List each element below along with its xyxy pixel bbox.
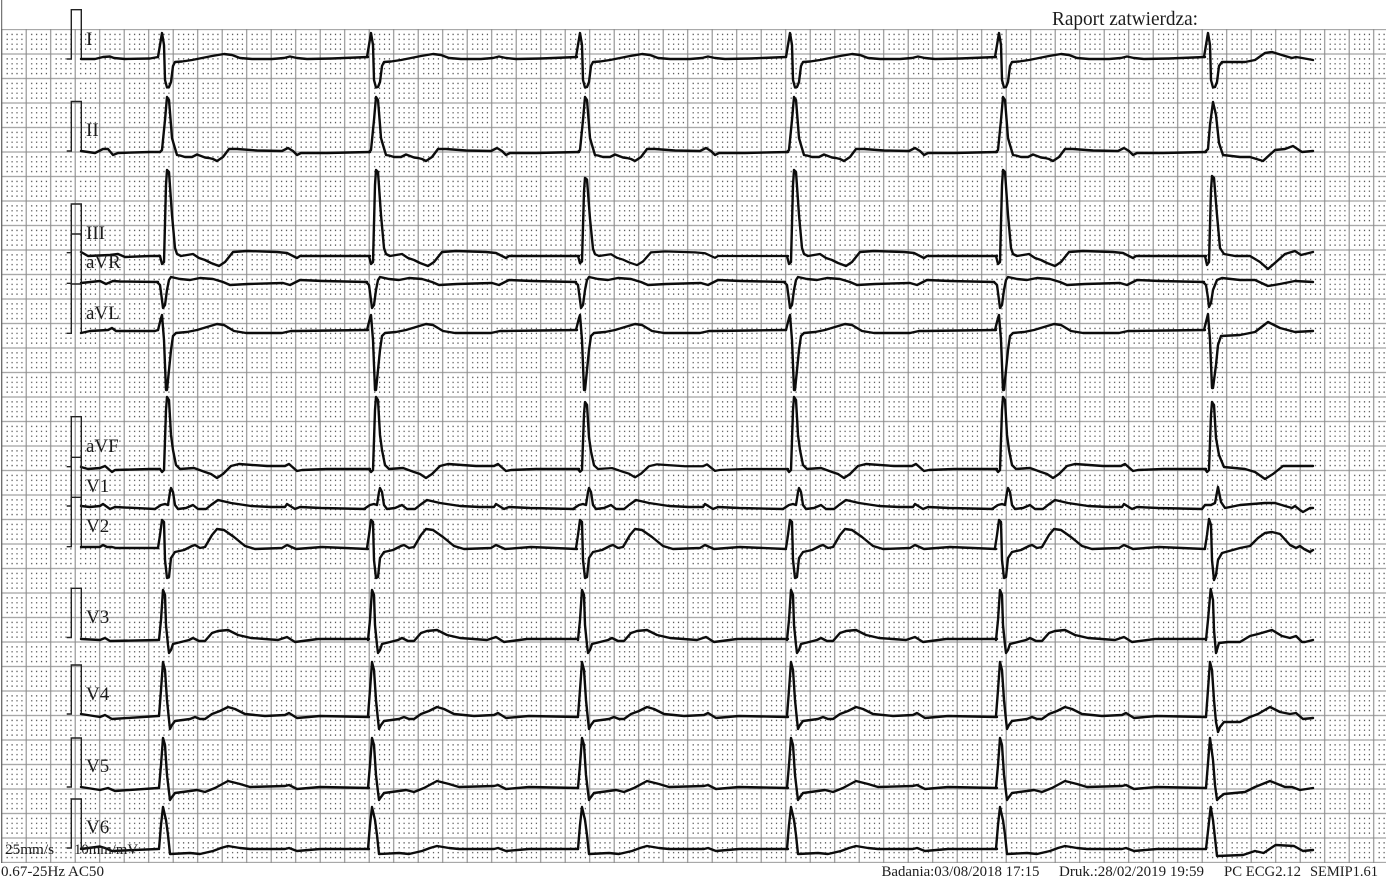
lead aVR calibration pulse xyxy=(67,234,81,283)
lead aVF waveform xyxy=(81,397,1313,479)
lead V3 waveform xyxy=(81,589,1313,653)
lead V4 xyxy=(67,662,1313,732)
lead aVF label: aVF xyxy=(86,436,119,457)
lead aVL waveform xyxy=(81,314,1313,390)
paper speed label: 25mm/s xyxy=(5,842,54,858)
examination date: Badania:03/08/2018 17:15 xyxy=(882,864,1040,880)
lead III waveform xyxy=(81,170,1313,269)
lead I waveform xyxy=(81,33,1313,88)
filter settings: 0.67-25Hz AC50 xyxy=(1,864,104,880)
lead V1 waveform xyxy=(81,487,1313,512)
gain label: 10mm/mV xyxy=(74,842,138,858)
software version: PC ECG2.12 xyxy=(1224,864,1301,880)
lead V3 label: V3 xyxy=(86,607,109,628)
lead III label: III xyxy=(86,223,105,244)
lead II calibration pulse xyxy=(67,102,81,151)
lead V4 label: V4 xyxy=(86,684,110,705)
report approval heading: Raport zatwierdza: xyxy=(1052,8,1198,30)
lead V6 calibration pulse xyxy=(67,799,81,848)
lead V5 xyxy=(67,738,1313,800)
lead V5 waveform xyxy=(81,738,1313,800)
firmware version: SEMIP1.61 xyxy=(1310,864,1378,880)
lead aVR label: aVR xyxy=(86,252,121,273)
lead V1 label: V1 xyxy=(86,476,109,497)
lead V4 calibration pulse xyxy=(67,665,81,714)
lead II label: II xyxy=(86,120,99,141)
lead V6 label: V6 xyxy=(86,817,109,838)
lead V4 waveform xyxy=(81,662,1313,732)
lead aVF calibration pulse xyxy=(67,417,81,467)
lead II xyxy=(67,97,1313,161)
lead aVL calibration pulse xyxy=(67,284,81,333)
lead V6 waveform xyxy=(81,807,1313,856)
lead aVR xyxy=(67,234,1313,308)
lead aVF xyxy=(67,397,1313,479)
print date: Druk.:28/02/2019 19:59 xyxy=(1059,864,1204,880)
lead V5 label: V5 xyxy=(86,756,109,777)
lead III xyxy=(67,170,1313,269)
lead V3 xyxy=(67,588,1313,653)
lead V6 xyxy=(67,799,1313,856)
lead I label: I xyxy=(86,29,92,50)
lead V2 label: V2 xyxy=(86,516,109,537)
lead I calibration pulse xyxy=(67,10,81,59)
lead V2 xyxy=(67,497,1313,580)
lead aVL label: aVL xyxy=(86,303,120,324)
lead V5 calibration pulse xyxy=(67,738,81,787)
lead aVR waveform xyxy=(81,277,1313,308)
lead V3 calibration pulse xyxy=(67,588,81,638)
lead aVL xyxy=(67,284,1313,390)
lead I xyxy=(67,10,1313,88)
lead V1 calibration pulse xyxy=(67,457,81,506)
lead II waveform xyxy=(81,97,1313,161)
left border line xyxy=(1,0,3,863)
lead III calibration pulse xyxy=(67,204,81,253)
lead V2 calibration pulse xyxy=(67,497,81,547)
lead V1 xyxy=(67,457,1313,512)
lead V2 waveform xyxy=(81,519,1313,580)
